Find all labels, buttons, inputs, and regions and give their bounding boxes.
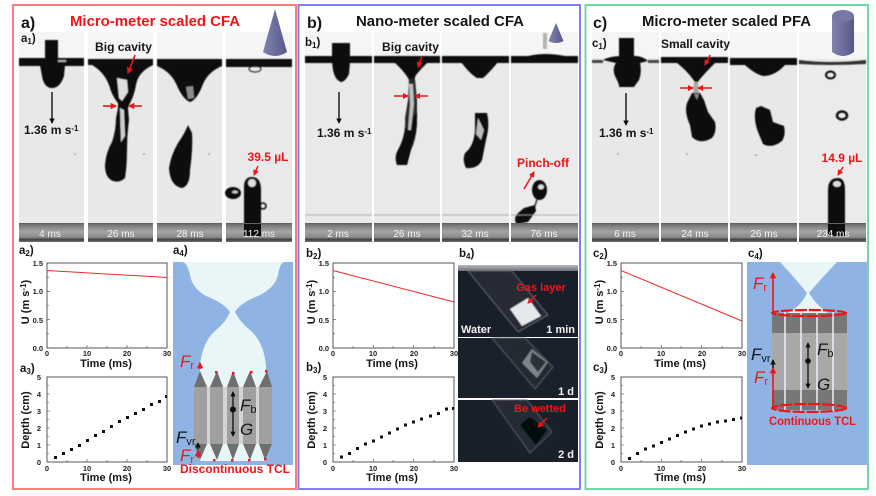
panel: nano-meter scaled CFA <box>298 5 580 489</box>
chart: depth a3 <box>20 373 171 484</box>
label a3: 3 <box>26 367 31 376</box>
annotation: 39.5 microlitre <box>248 150 288 175</box>
photo strip c1: 26 ms <box>750 229 778 240</box>
annotation: big cavity: Big cavity <box>95 42 153 54</box>
chart: velocity a2: 0.0 <box>33 344 43 353</box>
chart: depth b3: 30 <box>450 464 458 473</box>
chart: depth a3: 1 <box>37 441 41 450</box>
chart: velocity c2 <box>593 259 746 370</box>
arrow: impact speed: 1.36 m s <box>599 126 646 140</box>
arrow: impact speed: -1 <box>71 124 79 133</box>
annotation: small cavity: Small cavity <box>661 39 731 51</box>
diagram: continuous TCL <box>747 262 867 465</box>
icon: cylinder <box>832 10 854 56</box>
chart: depth b3 <box>306 373 458 484</box>
diagram: continuous TCL: b <box>827 348 834 360</box>
chart: depth c3: 4 <box>611 390 616 399</box>
chart: depth a3: 30 <box>163 464 171 473</box>
label b1: ) <box>316 37 320 49</box>
chart: depth b3: 4 <box>323 390 328 399</box>
label b2: ) <box>317 248 321 260</box>
chart: velocity c2: 20 <box>698 349 706 358</box>
label a4: 4 <box>179 249 184 258</box>
diagram: continuous TCL: F <box>817 340 827 359</box>
chart: velocity a2 <box>19 259 171 370</box>
label a4: ) <box>184 245 188 257</box>
chart: depth c3: 10 <box>657 464 665 473</box>
chart: velocity b2: 20 <box>410 349 418 358</box>
chart: depth c3: 20 <box>698 464 706 473</box>
photo strip b1: 2 ms <box>327 229 349 240</box>
chart: velocity b2: U (m s <box>306 291 318 324</box>
chart: depth c3: 5 <box>611 373 615 382</box>
chart: depth b3: 2 <box>323 424 327 433</box>
chart: velocity c2: 0 <box>619 349 623 358</box>
chart: velocity b2: 10 <box>369 349 377 358</box>
diagram: discontinuous TCL: vr <box>186 436 196 448</box>
arrow: impact speed <box>24 92 79 137</box>
chart: velocity a2: 1.5 <box>33 259 43 268</box>
diagram: discontinuous TCL: G <box>240 420 253 439</box>
annotation: be wetted <box>514 403 566 427</box>
label b4: ) <box>470 248 474 260</box>
chart: velocity b2: 1.5 <box>319 259 329 268</box>
photos: gas layer over time: 1 min <box>546 324 575 336</box>
photos: gas layer over time: 1 d <box>558 386 574 398</box>
label b3: b <box>306 362 313 374</box>
arrow: impact speed <box>599 93 654 140</box>
label c4: 4 <box>754 252 759 261</box>
annotation: be wetted: Be wetted <box>514 403 566 415</box>
label a2: ) <box>30 245 34 257</box>
arrow: impact speed <box>317 92 372 140</box>
label a1: 1 <box>27 37 32 46</box>
photos: gas layer over time: 2 d <box>558 449 574 461</box>
diagram: continuous TCL: G <box>817 375 830 394</box>
chart: depth a3: Time (ms) <box>80 472 132 484</box>
arrow: impact speed: -1 <box>364 127 372 136</box>
photo strip a1: 28 ms <box>176 229 204 240</box>
diagram: continuous TCL: F <box>753 274 763 293</box>
diagram: continuous TCL: F <box>754 368 764 387</box>
photo strip a1: 4 ms <box>39 229 61 240</box>
label b4: 4 <box>466 252 471 261</box>
panel: micro-meter scaled PFA <box>586 5 868 489</box>
label b1: 1 <box>312 41 317 50</box>
photo strip b1: 32 ms <box>461 229 489 240</box>
diagram: continuous TCL: r <box>764 376 768 388</box>
label b2: b <box>306 248 313 260</box>
label a2: 2 <box>25 249 30 258</box>
diagram: continuous TCL: Continuous TCL <box>769 416 856 428</box>
chart: depth a3: 0 <box>45 464 49 473</box>
diagram: discontinuous TCL: F <box>176 428 186 447</box>
label a1: ) <box>32 33 36 45</box>
chart: velocity c2: 30 <box>738 349 746 358</box>
diagram: continuous TCL: vr <box>761 353 771 365</box>
chart: depth c3: 3 <box>611 407 615 416</box>
chart: velocity a2: Time (ms) <box>80 358 132 370</box>
chart: velocity a2: 20 <box>123 349 131 358</box>
photo strip b1: 76 ms <box>530 229 558 240</box>
chart: velocity b2: 0.5 <box>319 316 329 325</box>
chart: depth b3: 3 <box>323 407 327 416</box>
label c4: ) <box>759 248 763 260</box>
chart: depth a3: 4 <box>37 390 42 399</box>
diagram: discontinuous TCL: F <box>180 446 190 465</box>
label c3: ) <box>604 362 608 374</box>
chart: velocity b2: 0.0 <box>319 344 329 353</box>
heading: micro-meter scaled PFA: Micro-meter scaled PFA <box>642 14 812 30</box>
chart: depth b3: 10 <box>369 464 377 473</box>
photo strip b1 <box>305 32 578 242</box>
chart: depth b3: 0 <box>323 458 327 467</box>
chart: velocity b2: 30 <box>450 349 458 358</box>
photo strip c1 <box>592 32 866 242</box>
chart: velocity a2: 30 <box>163 349 171 358</box>
diagram: discontinuous TCL: F <box>240 396 250 415</box>
annotation: gas layer: Gas layer <box>516 282 566 294</box>
chart: velocity a2: 1.0 <box>33 287 43 296</box>
label c2: ) <box>604 248 608 260</box>
panel: micro-meter scaled CFA <box>13 5 296 489</box>
chart: depth b3: 5 <box>323 373 327 382</box>
label c1: 1 <box>598 42 603 51</box>
label a4: a <box>173 245 179 257</box>
diagram: discontinuous TCL <box>173 262 293 476</box>
label a2: a <box>19 245 25 257</box>
label a3: ) <box>31 363 35 375</box>
chart: velocity a2: ) <box>20 279 32 283</box>
chart: depth c3: 0 <box>611 458 615 467</box>
chart: velocity a2: 0 <box>45 349 49 358</box>
label c2: 2 <box>599 252 604 261</box>
label a3: a <box>20 363 26 375</box>
icon: cone <box>263 9 287 56</box>
chart: depth b3: 20 <box>410 464 418 473</box>
annotation: big cavity <box>95 42 153 106</box>
chart: depth b3: 1 <box>323 441 327 450</box>
panel label c: c) <box>593 15 607 32</box>
chart: velocity b2: -1 <box>305 283 314 291</box>
diagram: discontinuous TCL: r <box>190 454 194 466</box>
chart: velocity b2: ) <box>306 279 318 283</box>
annotation: 14.9 microlitre: 14.9 µL <box>822 151 862 165</box>
chart: velocity c2: 1.0 <box>607 287 617 296</box>
chart: depth a3: 2 <box>37 424 41 433</box>
annotation: big cavity <box>382 42 440 96</box>
label c1: ) <box>603 38 607 50</box>
annotation: pinch-off <box>517 156 570 189</box>
chart: velocity a2: -1 <box>19 283 28 291</box>
chart: velocity b2 <box>305 259 458 370</box>
chart: depth c3: 1 <box>611 441 615 450</box>
icon: small cone <box>548 23 564 43</box>
annotation: 39.5 microlitre: 39.5 µL <box>248 150 288 164</box>
chart: velocity a2: 10 <box>83 349 91 358</box>
heading: micro-meter scaled CFA: Micro-meter scaled CFA <box>70 14 241 30</box>
chart: depth b3: 0 <box>331 464 335 473</box>
chart: depth c3: Time (ms) <box>654 472 706 484</box>
photo strip c1: 6 ms <box>614 229 636 240</box>
photo strip c1: 24 ms <box>681 229 709 240</box>
label a1: a <box>21 33 27 45</box>
diagram: continuous TCL: F <box>751 345 761 364</box>
diagram: discontinuous TCL: b <box>250 404 257 416</box>
panel label a: a) <box>21 15 35 32</box>
chart: velocity c2: 0.5 <box>607 316 617 325</box>
photo strip c1: 234 ms <box>817 229 849 240</box>
photo strip b1: 26 ms <box>393 229 421 240</box>
arrow: impact speed: -1 <box>646 127 654 136</box>
diagram: discontinuous TCL: F <box>180 352 190 371</box>
photo strip a1 <box>19 32 292 242</box>
chart: depth c3: 2 <box>611 424 615 433</box>
chart: depth a3: 10 <box>83 464 91 473</box>
chart: velocity c2: Time (ms) <box>654 358 706 370</box>
chart: depth a3: 20 <box>123 464 131 473</box>
photo strip a1: 26 ms <box>107 229 135 240</box>
chart: velocity c2: -1 <box>593 283 602 291</box>
chart: velocity c2: 0.0 <box>607 344 617 353</box>
annotation: 14.9 microlitre <box>822 151 862 175</box>
chart: velocity c2: U (m s <box>594 291 606 324</box>
label b4: b <box>459 248 466 260</box>
chart: velocity b2: Time (ms) <box>366 358 418 370</box>
arrow: impact speed: 1.36 m s <box>24 123 71 137</box>
chart: velocity a2: U (m s <box>20 291 32 324</box>
chart: velocity b2: 0 <box>331 349 335 358</box>
photos: gas layer over time: Water <box>461 324 492 336</box>
label c3: 3 <box>599 366 604 375</box>
diagram: discontinuous TCL: r <box>190 360 194 372</box>
chart: velocity a2: 0.5 <box>33 316 43 325</box>
annotation: gas layer <box>516 282 566 303</box>
diagram: discontinuous TCL: Discontinuous TCL <box>180 462 290 476</box>
chart: depth b3: Depth (cm) <box>306 391 318 449</box>
label c2: c <box>593 248 599 260</box>
label b3: 3 <box>313 366 318 375</box>
diagram: continuous TCL: r <box>763 282 767 294</box>
arrow: impact speed: 1.36 m s <box>317 126 364 140</box>
photos: gas layer over time <box>458 265 578 462</box>
chart: depth a3: 3 <box>37 407 41 416</box>
heading: nano-meter scaled CFA: Nano-meter scaled CFA <box>356 14 525 30</box>
annotation: pinch-off: Pinch-off <box>517 156 570 170</box>
chart: depth b3: Time (ms) <box>366 472 418 484</box>
chart: depth a3: 5 <box>37 373 41 382</box>
label c1: c <box>592 38 598 50</box>
chart: velocity c2: 1.5 <box>607 259 617 268</box>
label b2: 2 <box>313 252 318 261</box>
chart: velocity c2: ) <box>594 279 606 283</box>
label b3: ) <box>317 362 321 374</box>
chart: depth a3: Depth (cm) <box>20 391 32 449</box>
chart: depth c3 <box>594 373 746 484</box>
chart: velocity c2: 10 <box>657 349 665 358</box>
annotation: small cavity <box>661 39 731 88</box>
chart: depth c3: 0 <box>619 464 623 473</box>
label c4: c <box>748 248 754 260</box>
annotation: big cavity: Big cavity <box>382 42 440 54</box>
chart: depth a3: 0 <box>37 458 41 467</box>
label c3: c <box>593 362 599 374</box>
label b1: b <box>305 37 312 49</box>
chart: depth c3: 30 <box>738 464 746 473</box>
chart: depth c3: Depth (cm) <box>594 391 606 449</box>
panel label b: b) <box>307 15 322 32</box>
photo strip a1: 112 ms <box>243 229 275 240</box>
chart: velocity b2: 1.0 <box>319 287 329 296</box>
